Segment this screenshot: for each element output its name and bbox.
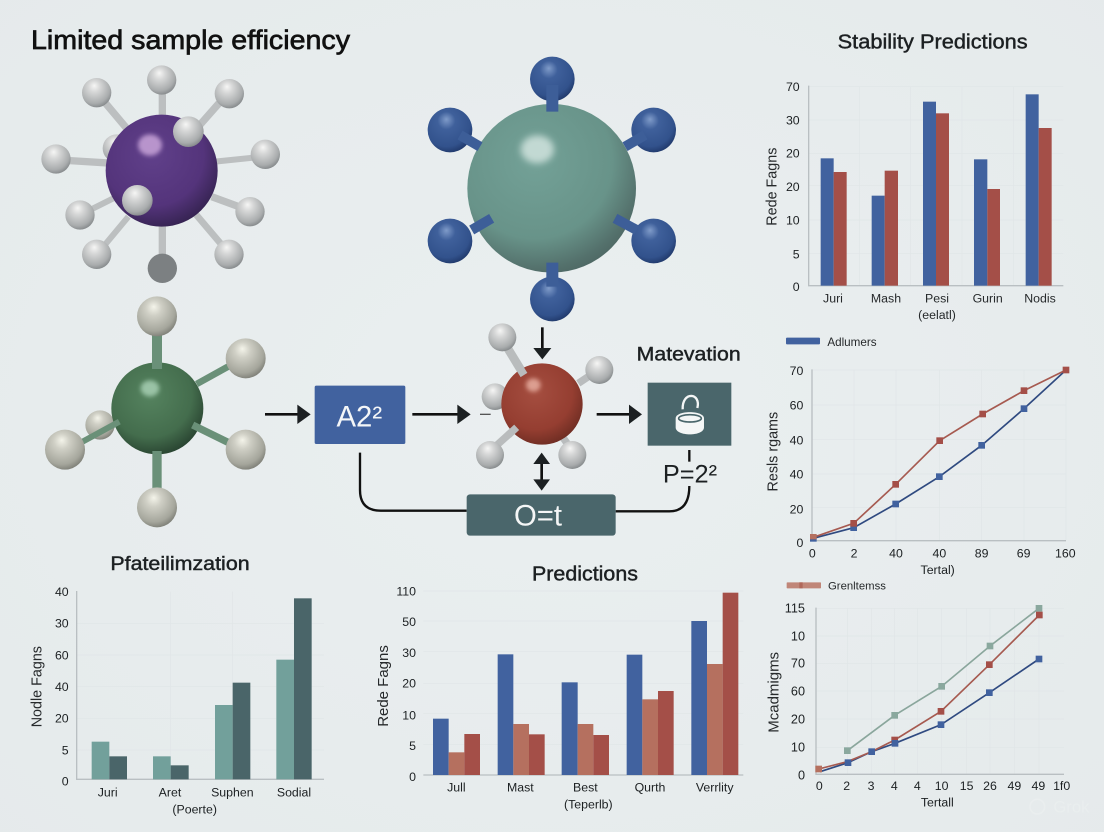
legend: Grenltemss (828, 580, 886, 592)
arrow: into teal box (597, 405, 642, 424)
chart: line chart upper: Tertal) (921, 563, 955, 577)
chart: Predictions: 10 (402, 708, 416, 722)
chart: line chart upper: 40 (790, 468, 803, 482)
chart: line chart lower: 20 (791, 712, 805, 726)
legend (786, 336, 877, 349)
chart: line chart lower: 49 (1031, 779, 1045, 793)
arrow: down into red molecule (533, 327, 551, 359)
chart: Stability Predictions: 70 (786, 80, 800, 94)
chart: Stability Predictions: Pesi (925, 291, 949, 305)
chart: line chart upper: 160 (1055, 546, 1076, 560)
chart: Predictions: 50 (402, 615, 416, 629)
connector lines (360, 450, 689, 511)
chart: Pfateilimzation: Nodle Fagns (29, 646, 45, 727)
chart: Stability Predictions: 20 (786, 147, 800, 161)
chart: line chart lower: 10 (791, 629, 805, 643)
chart: Predictions: Mast (507, 781, 534, 795)
chart: Predictions: Best (573, 781, 598, 795)
molecule: teal with blue atoms (428, 57, 676, 321)
chart: line chart upper: 70 (790, 364, 803, 378)
chart: line chart lower: 10 (791, 741, 805, 755)
chart: line chart upper: 2 (851, 546, 858, 560)
chart: line chart upper: 89 (975, 546, 989, 560)
chart: Stability Predictions: Nodis (1024, 291, 1056, 305)
chart: line chart lower: Tertall (921, 796, 954, 810)
chart: line chart upper: 40 (889, 546, 903, 560)
chart: Stability Predictions (765, 31, 1063, 349)
watermark (1030, 797, 1090, 816)
chart: line chart upper: 40 (790, 433, 803, 447)
chart: line chart lower: 3 (868, 779, 875, 793)
chart: line chart lower: 2 (843, 779, 850, 793)
chart: Predictions: Rede Fagns (375, 645, 392, 727)
chart: line chart lower: 60 (791, 684, 805, 698)
chart: Pfateilimzation: 40 (55, 680, 69, 694)
chart: Stability Predictions: (eelatl) (918, 308, 956, 322)
chart: Predictions: 110 (396, 584, 416, 598)
chart: Pfateilimzation: 5 (62, 743, 69, 757)
chart: Pfateilimzation: Sodial (277, 786, 311, 800)
chart: Predictions: 20 (402, 677, 416, 691)
chart: line chart upper: 40 (932, 546, 946, 560)
box: A2 (315, 386, 405, 444)
chart: Predictions (375, 564, 743, 811)
chart: Pfateilimzation: Suphen (211, 786, 254, 800)
box: lock icon (648, 383, 731, 446)
heading: Pfateilimzation (110, 554, 250, 575)
chart: Predictions: Verrlity (696, 781, 734, 795)
heading: Stability Predictions (838, 31, 1028, 53)
chart: Predictions: 5 (409, 739, 416, 753)
chart: line chart lower: 115 (785, 602, 805, 616)
box: O=t (467, 494, 616, 536)
arrow: double headed (533, 453, 550, 491)
chart: Pfateilimzation: 0 (62, 774, 69, 788)
heading: Predictions (532, 564, 638, 586)
chart: Predictions: Qurth (635, 781, 666, 795)
chart: Pfateilimzation: 60 (55, 648, 69, 662)
molecule: red (476, 323, 613, 469)
chart: line chart lower: 15 (960, 779, 974, 793)
chart: line chart lower: Mcadmigms (766, 652, 783, 733)
chart: Pfateilimzation: 40 (55, 585, 69, 599)
molecule: green (45, 296, 266, 527)
chart: line chart lower: 1f0 (1053, 779, 1070, 793)
chart: Stability Predictions: Mash (871, 291, 901, 305)
label: Matevation: Matevation (637, 344, 741, 366)
chart: line chart lower: 0 (798, 768, 805, 782)
chart: Pfateilimzation (29, 554, 324, 816)
chart: line chart lower: 70 (791, 657, 805, 671)
box: O=t: O=t (514, 500, 562, 533)
arrow: into red molecule (412, 405, 491, 424)
chart: Pfateilimzation: Aret (159, 786, 182, 800)
chart: Stability Predictions: 5 (793, 248, 800, 262)
label: P=2: P=2² (663, 460, 717, 488)
chart: Predictions: 0 (409, 770, 416, 784)
chart: line chart upper (765, 364, 1076, 577)
chart: line chart lower: 4 (891, 779, 898, 793)
chart: Pfateilimzation: 20 (55, 712, 69, 726)
chart: Pfateilimzation: (Poerte) (172, 802, 217, 816)
chart: Predictions: 30 (402, 646, 416, 660)
chart: Pfateilimzation: Juri (98, 786, 118, 800)
chart: line chart upper: 60 (790, 398, 803, 412)
arrow: into A2 box (265, 405, 311, 424)
chart: line chart lower (766, 580, 1090, 816)
chart: Predictions: Jull (447, 781, 466, 795)
molecule: purple (41, 65, 280, 283)
legend (787, 580, 886, 592)
chart: Stability Predictions: Gurin (973, 291, 1003, 305)
flow diagram (265, 323, 741, 536)
chart: Predictions: (Teperlb) (564, 797, 613, 811)
legend: Adlumers (827, 336, 877, 349)
chart: Stability Predictions: 10 (786, 213, 800, 227)
chart: line chart lower: 49 (1007, 779, 1021, 793)
box: A2: A2² (337, 401, 382, 434)
chart: line chart upper: 20 (790, 502, 803, 516)
title: Limited sample efficiency (31, 25, 351, 55)
chart: Stability Predictions: Juri (823, 291, 843, 305)
chart: line chart upper: 0 (809, 546, 816, 560)
chart: line chart lower: 26 (983, 779, 997, 793)
chart: Stability Predictions: Rede Fagns (765, 148, 781, 226)
chart: Stability Predictions: 0 (793, 280, 800, 294)
watermark: Grok (1053, 797, 1090, 816)
chart: Stability Predictions: 30 (786, 113, 800, 127)
chart: Pfateilimzation: 30 (55, 617, 69, 631)
chart: line chart lower: 4 (914, 779, 921, 793)
chart: line chart lower: 0 (816, 779, 823, 793)
chart: line chart upper: 69 (1017, 546, 1031, 560)
chart: Stability Predictions: 20 (786, 180, 800, 194)
chart: line chart upper: 0 (796, 536, 803, 550)
chart: line chart upper: Resls rgams (765, 412, 781, 491)
chart: line chart lower: 10 (935, 779, 949, 793)
